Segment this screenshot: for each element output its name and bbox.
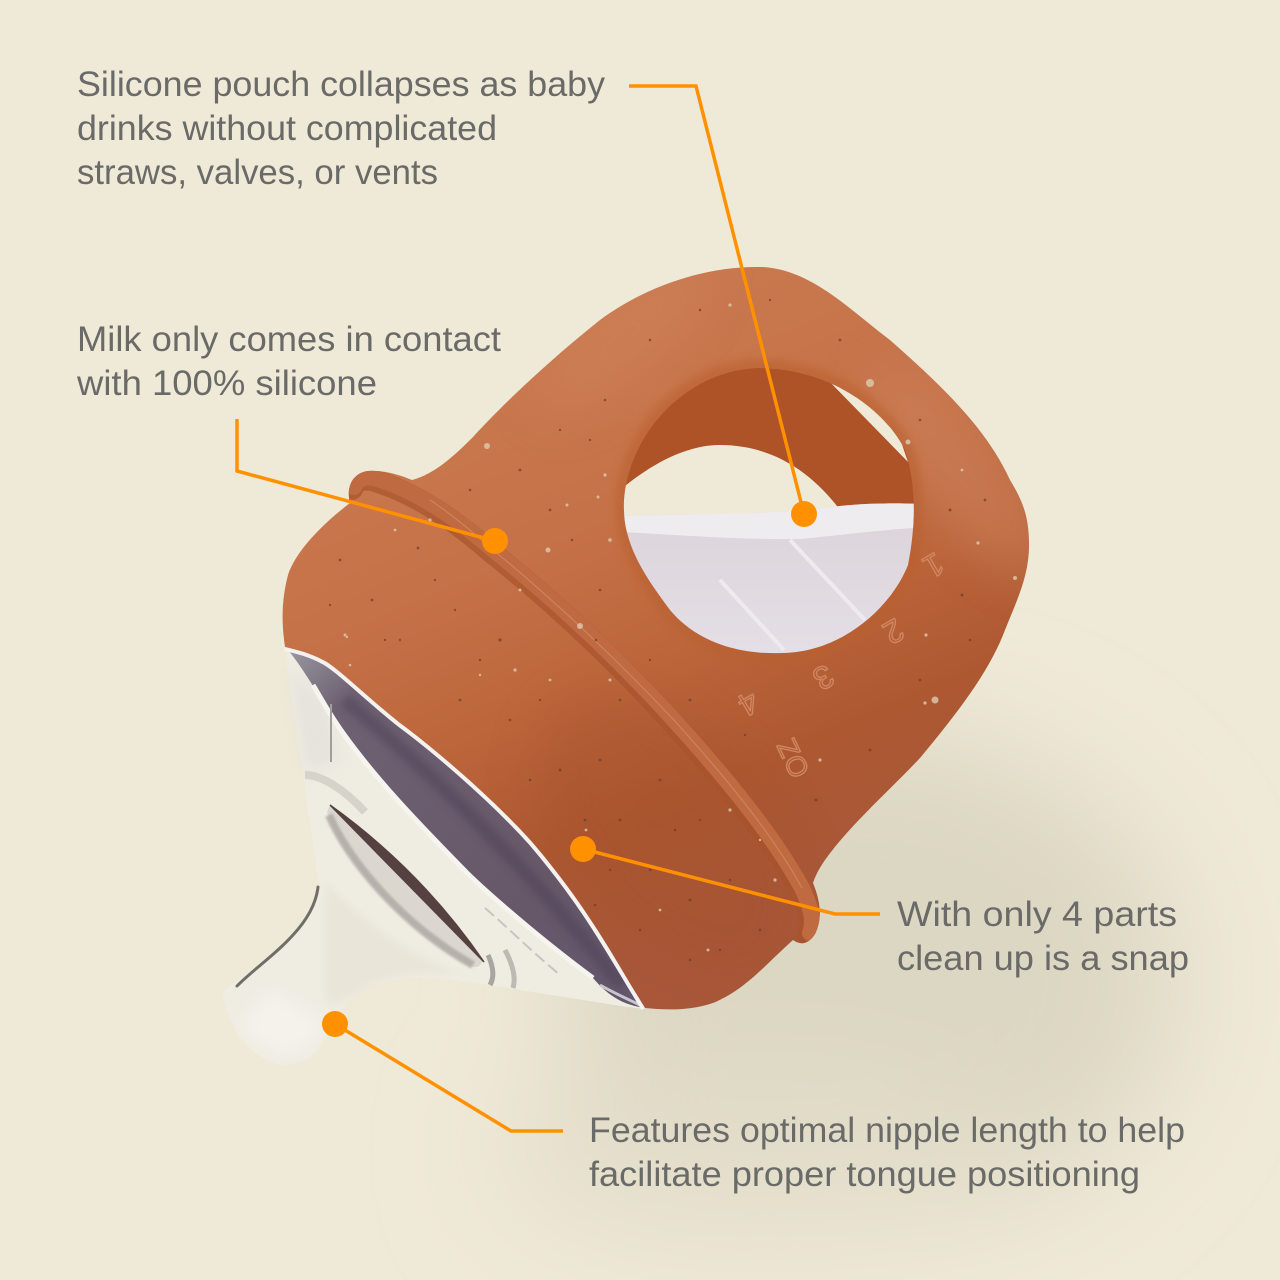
- terracotta sleeve: [283, 267, 1029, 1009]
- leader line: four parts: [570, 836, 880, 914]
- finger hole: [620, 368, 920, 680]
- illustration: silicone bottle: [223, 239, 1078, 1065]
- callout text: nipple length: [589, 1111, 1185, 1194]
- callout text: nipple length: Features optimal nipple length to help: [589, 1111, 1185, 1150]
- embossed size marks: 4: [732, 683, 765, 724]
- collar ring: [305, 775, 365, 812]
- leader line: silicone pouch: [629, 86, 817, 527]
- callout text: four parts: [897, 895, 1189, 978]
- callout text: milk contact: [76, 320, 501, 403]
- callout: four parts: [570, 836, 1189, 978]
- callout text: four parts: clean up is a snap: [897, 939, 1189, 978]
- callout text: silicone pouch: Silicone pouch collapses as baby: [77, 65, 606, 104]
- embossed size marks: 3: [807, 657, 840, 698]
- leader line: milk contact: [237, 419, 508, 554]
- speckles: [329, 299, 986, 961]
- view through hole: rear gap: [832, 384, 908, 462]
- callout: nipple length: [322, 1011, 1185, 1194]
- clear silicone nipple and collar: [223, 647, 645, 1065]
- sleeve shading and ridge: [352, 239, 1078, 1035]
- callout text: four parts: With only 4 parts: [897, 895, 1177, 934]
- callout text: silicone pouch: straws, valves, or vents: [77, 153, 438, 192]
- inner pouch: [624, 503, 914, 654]
- embossed size marks: 1: [917, 545, 950, 586]
- callout text: silicone pouch: [77, 65, 606, 192]
- callout text: silicone pouch: drinks without complicated: [77, 109, 497, 148]
- callout text: nipple length: facilitate proper tongue positioning: [589, 1155, 1140, 1194]
- drop shadow of the bottle: [500, 730, 1180, 1240]
- callout text: milk contact: with 100% silicone: [76, 364, 377, 403]
- inner window: lens and dark slit: [327, 805, 483, 967]
- dark window showing the inner body: [288, 650, 645, 1008]
- callout text: milk contact: Milk only comes in contact: [77, 320, 501, 359]
- pale speckles: [344, 303, 1017, 951]
- leader line: nipple length: [322, 1011, 563, 1131]
- view through hole: background: [620, 445, 840, 530]
- embossed size marks: 2: [877, 611, 910, 652]
- callout: silicone pouch: [77, 65, 817, 527]
- embossed size marks: OZ: [771, 734, 815, 783]
- embossed size marks: [732, 545, 950, 783]
- raised ridge band: [352, 478, 812, 935]
- callout: milk contact: [76, 320, 508, 554]
